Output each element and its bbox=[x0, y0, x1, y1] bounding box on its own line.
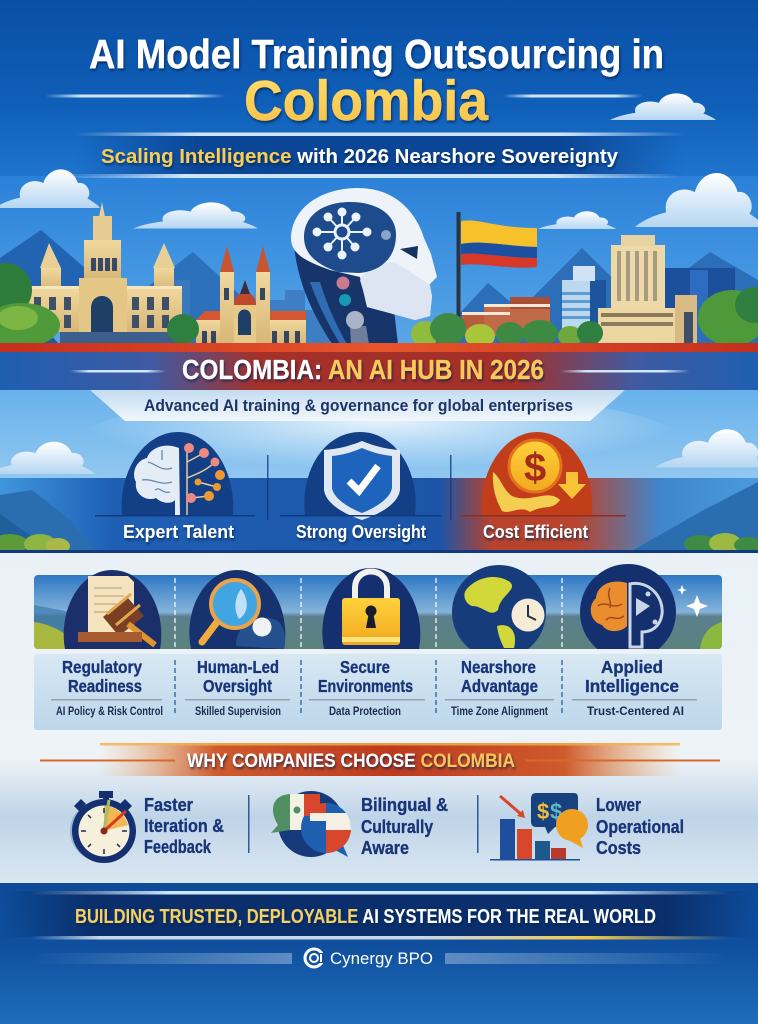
icon: shield bbox=[304, 432, 416, 520]
icon: falling cost chart bbox=[490, 793, 588, 860]
footer statement: BUILDING TRUSTED, DEPLOYABLE AI SYSTEMS FOR THE REAL WORLD bbox=[75, 905, 656, 928]
title: AI Model Training Outsourcing in bbox=[89, 31, 664, 77]
photo strip bbox=[34, 575, 722, 649]
neural network bbox=[314, 208, 370, 258]
light section background bbox=[0, 553, 758, 883]
column: secure environments: Environments bbox=[318, 676, 413, 696]
brain cavity bbox=[304, 202, 396, 273]
why heading: WHY COMPANIES CHOOSE COLOMBIA bbox=[187, 750, 515, 772]
column: human-led oversight: Oversight bbox=[203, 676, 272, 696]
item: cost efficient bbox=[460, 432, 626, 542]
column: nearshore advantage: Advantage bbox=[461, 676, 538, 696]
column: applied intelligence: Intelligence bbox=[585, 676, 679, 696]
reason: faster iteration: Faster bbox=[144, 795, 193, 815]
column: human-led oversight: Human-Led bbox=[197, 657, 279, 677]
label panel bbox=[34, 654, 722, 730]
icon: gavel on document bbox=[64, 570, 161, 649]
right trees and shrubs bbox=[411, 287, 758, 348]
title bbox=[89, 31, 664, 133]
column: human-led oversight bbox=[189, 570, 285, 718]
shrubs bbox=[0, 533, 758, 554]
tagline bbox=[90, 390, 625, 421]
column: nearshore advantage: Time Zone Alignment bbox=[451, 704, 548, 718]
sparkles bbox=[677, 585, 708, 617]
why heading bbox=[40, 743, 720, 776]
reason: bilingual: Bilingual & bbox=[361, 795, 448, 815]
reason: faster iteration bbox=[70, 791, 224, 863]
icon: coin and hand: $ bbox=[524, 446, 546, 490]
column: applied intelligence bbox=[580, 564, 708, 718]
icon: stopwatch bbox=[70, 791, 136, 863]
jaw plate bbox=[360, 262, 432, 320]
header background bbox=[0, 0, 758, 176]
column: secure environments: Secure bbox=[340, 657, 390, 677]
clouds bbox=[0, 169, 758, 229]
reason: lower costs: Costs bbox=[596, 838, 641, 858]
column: regulatory readiness bbox=[56, 570, 163, 718]
footer bbox=[0, 883, 758, 1024]
modern buildings bbox=[462, 235, 735, 343]
reason: lower costs bbox=[490, 793, 684, 860]
logo: Cynergy BPO: Cynergy BPO bbox=[330, 949, 433, 968]
left trees bbox=[0, 263, 199, 347]
reason: bilingual: Aware bbox=[361, 838, 409, 858]
head shell bbox=[291, 188, 437, 320]
column dividers bbox=[175, 578, 562, 648]
label: Expert Talent bbox=[123, 521, 234, 542]
dividers bbox=[267, 455, 452, 520]
reason: faster iteration: Feedback bbox=[144, 837, 212, 857]
robot head bbox=[291, 188, 437, 344]
column: secure environments bbox=[318, 568, 420, 718]
status lights bbox=[336, 276, 350, 290]
logo bars bbox=[30, 953, 730, 964]
icon: speech bubbles with flags bbox=[271, 791, 352, 857]
rules bbox=[51, 699, 697, 700]
tagline: Advanced AI training & governance for global enterprises bbox=[144, 396, 573, 415]
label: Strong Oversight bbox=[296, 521, 426, 542]
icon: half brain half circuit bbox=[580, 564, 676, 649]
column: nearshore advantage bbox=[451, 565, 548, 718]
reason: bilingual bbox=[271, 791, 448, 858]
subtitle: Scaling Intelligence with 2026 Nearshore Sovereignty bbox=[101, 145, 619, 168]
icon: padlock bbox=[322, 568, 420, 649]
icon: magnifying glass bbox=[189, 570, 285, 649]
palace bbox=[24, 202, 182, 343]
column: secure environments: Data Protection bbox=[329, 704, 401, 718]
mountains bbox=[0, 230, 758, 345]
icon: coin and hand bbox=[482, 432, 592, 515]
column: applied intelligence: Trust-Centered AI bbox=[587, 704, 684, 718]
subtitle band bbox=[75, 132, 685, 176]
item: expert talent bbox=[95, 432, 255, 542]
icon: falling cost chart: $ bbox=[537, 799, 549, 824]
label: Cost Efficient bbox=[483, 521, 588, 542]
icon: brain with circuit bbox=[122, 432, 233, 515]
red divider band bbox=[0, 343, 758, 352]
eye bbox=[400, 246, 418, 259]
hub heading band bbox=[0, 352, 758, 390]
reason: bilingual: Culturally bbox=[361, 817, 433, 837]
column: nearshore advantage: Nearshore bbox=[461, 657, 536, 677]
panel: five pillars bbox=[34, 564, 722, 730]
value props section bbox=[0, 390, 758, 554]
mountains bbox=[0, 482, 758, 553]
decorative title lines bbox=[45, 94, 643, 98]
column: applied intelligence: Applied bbox=[601, 657, 663, 677]
blue band bbox=[0, 478, 758, 553]
column: regulatory readiness: Regulatory bbox=[62, 657, 142, 677]
church bbox=[196, 246, 306, 345]
top cloud bbox=[610, 93, 716, 120]
skyline scene bbox=[0, 169, 758, 348]
title highlight: Colombia: Colombia bbox=[244, 69, 489, 133]
column: human-led oversight: Skilled Supervision bbox=[195, 704, 281, 718]
icon: globe and clock bbox=[452, 565, 546, 649]
dividers bbox=[248, 795, 478, 853]
reason: faster iteration: Iteration & bbox=[144, 816, 224, 836]
column: regulatory readiness: AI Policy & Risk Control bbox=[56, 704, 163, 718]
item: strong oversight bbox=[280, 432, 442, 542]
flag bbox=[456, 212, 537, 337]
column: regulatory readiness: Readiness bbox=[68, 676, 142, 696]
reason: lower costs: Operational bbox=[596, 817, 684, 837]
clouds bbox=[0, 429, 758, 502]
reason: lower costs: Lower bbox=[596, 795, 641, 815]
hub heading: COLOMBIA: AN AI HUB IN 2026 bbox=[182, 354, 544, 385]
neck and cables bbox=[294, 245, 398, 344]
icon: falling cost chart: $ bbox=[550, 799, 562, 824]
